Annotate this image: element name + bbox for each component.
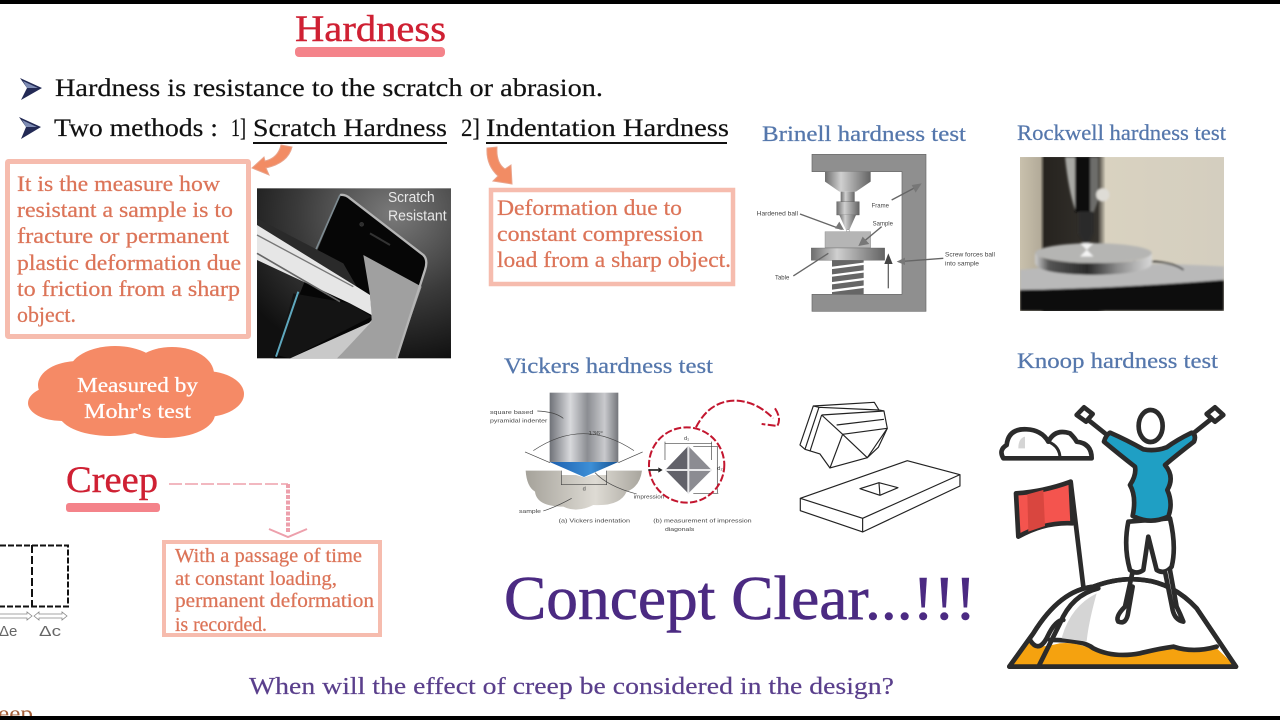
icon: small cloud bbox=[1001, 429, 1092, 458]
icon: climber figure bbox=[1077, 407, 1223, 622]
diagram: Brinell test machine: Sample bbox=[873, 221, 894, 227]
diagram: Vickers indentation: diagonals bbox=[665, 527, 695, 533]
panel: indentation hardness definition: Deformation due to bbox=[497, 195, 682, 220]
diagram: Vickers indentation: (b) measurement of impression bbox=[653, 518, 752, 524]
diagram: Vickers pyramid and impression bbox=[800, 402, 960, 532]
heading: Vickers hardness test: Vickers hardness test bbox=[504, 353, 714, 378]
bullet: two methods: Indentation Hardness bbox=[486, 113, 729, 142]
cloud callout: Mohr's test: Measured by bbox=[77, 373, 199, 397]
diagram: Brinell test machine: Screw forces ball bbox=[945, 253, 995, 259]
bullet: two methods: Scratch Hardness bbox=[253, 113, 447, 142]
icon: red flag bbox=[1016, 482, 1083, 587]
panel: scratch hardness definition: object. bbox=[17, 302, 76, 327]
panel: creep definition: is recorded. bbox=[175, 615, 267, 636]
icon: mountain bbox=[1009, 579, 1236, 667]
panel: creep definition: at constant loading, bbox=[175, 569, 337, 590]
diagram: Vickers indentation: d₂ bbox=[717, 466, 723, 472]
panel: scratch hardness definition: fracture or permanent bbox=[17, 223, 230, 248]
diagram: Brinell test machine: Hardened ball bbox=[757, 212, 798, 218]
diagram: Brinell test machine: Frame bbox=[872, 203, 890, 209]
icon: climber on mountain peak bbox=[1001, 407, 1236, 667]
bullet: two methods bbox=[19, 113, 729, 144]
diagram: creep deformation boxes: Δc bbox=[39, 623, 62, 640]
diagram: Vickers indentation: sample bbox=[519, 509, 541, 515]
panel: scratch hardness definition: plastic deformation due bbox=[17, 250, 241, 275]
panel: scratch hardness definition: resistant a sample is to bbox=[17, 197, 233, 222]
diagram: Brinell test machine: into sample bbox=[945, 262, 980, 268]
diagram: Vickers indentation: d bbox=[583, 487, 586, 493]
panel: scratch hardness definition bbox=[8, 162, 248, 336]
diagram: Brinell test machine bbox=[757, 154, 995, 311]
panel: scratch hardness definition: to friction from a sharp bbox=[17, 276, 240, 301]
diagram: Vickers indentation: 136° bbox=[588, 431, 603, 437]
heading: Creep: Creep bbox=[66, 460, 158, 501]
question: creep in design: When will the effect of creep be considered in the design? bbox=[249, 673, 894, 700]
diagram: Vickers indentation: d₁ bbox=[684, 436, 689, 442]
heading: Brinell hardness test: Brinell hardness test bbox=[762, 121, 967, 146]
bullet: two methods: 2] bbox=[461, 113, 480, 142]
diagram: Vickers indentation bbox=[490, 393, 779, 533]
title: Hardness: Hardness bbox=[295, 9, 446, 50]
diagram: creep deformation boxes bbox=[0, 545, 68, 640]
image: scratch resistant phone: Scratch bbox=[388, 190, 435, 206]
panel: creep definition bbox=[164, 542, 380, 636]
image: scratch resistant phone: Resistant bbox=[388, 209, 447, 225]
diagram: Vickers indentation: impression bbox=[634, 494, 664, 500]
panel: creep definition: With a passage of time bbox=[175, 546, 362, 567]
panel: scratch hardness definition: It is the measure how bbox=[17, 171, 221, 196]
bullet: two methods: 1] bbox=[231, 113, 246, 142]
arrow: indentation hardness to definition bbox=[487, 147, 512, 184]
cloud callout: Mohr's test bbox=[28, 346, 244, 438]
panel: creep definition: permanent deformation bbox=[175, 591, 374, 612]
image: Rockwell test photo bbox=[1020, 157, 1224, 311]
bullet: two methods: Two methods : bbox=[54, 113, 218, 142]
top black bar bbox=[0, 0, 1280, 4]
bottom black bar bbox=[0, 716, 1280, 720]
arrow: scratch hardness to definition bbox=[252, 145, 292, 175]
bullet: hardness definition: Hardness is resistance to the scratch or abrasion. bbox=[55, 73, 603, 102]
diagram: Vickers indentation: square based bbox=[490, 410, 533, 416]
diagram: Vickers indentation: pyramidal indenter bbox=[490, 419, 547, 425]
heading: Knoop hardness test: Knoop hardness test bbox=[1017, 348, 1219, 373]
image: scratch resistant phone bbox=[257, 188, 451, 358]
panel: indentation hardness definition bbox=[491, 190, 733, 284]
cloud callout: Mohr's test: Mohr's test bbox=[84, 399, 191, 423]
panel: indentation hardness definition: load from a sharp object. bbox=[497, 247, 731, 272]
arrow: creep to definition bbox=[169, 484, 307, 537]
title: Concept Clear: Concept Clear...!!! bbox=[504, 565, 976, 633]
panel: indentation hardness definition: constant compression bbox=[497, 221, 703, 246]
diagram: Vickers indentation: (a) Vickers indentation bbox=[559, 518, 630, 524]
heading: Rockwell hardness test: Rockwell hardness test bbox=[1017, 120, 1227, 145]
diagram: Brinell test machine: Table bbox=[775, 275, 790, 281]
